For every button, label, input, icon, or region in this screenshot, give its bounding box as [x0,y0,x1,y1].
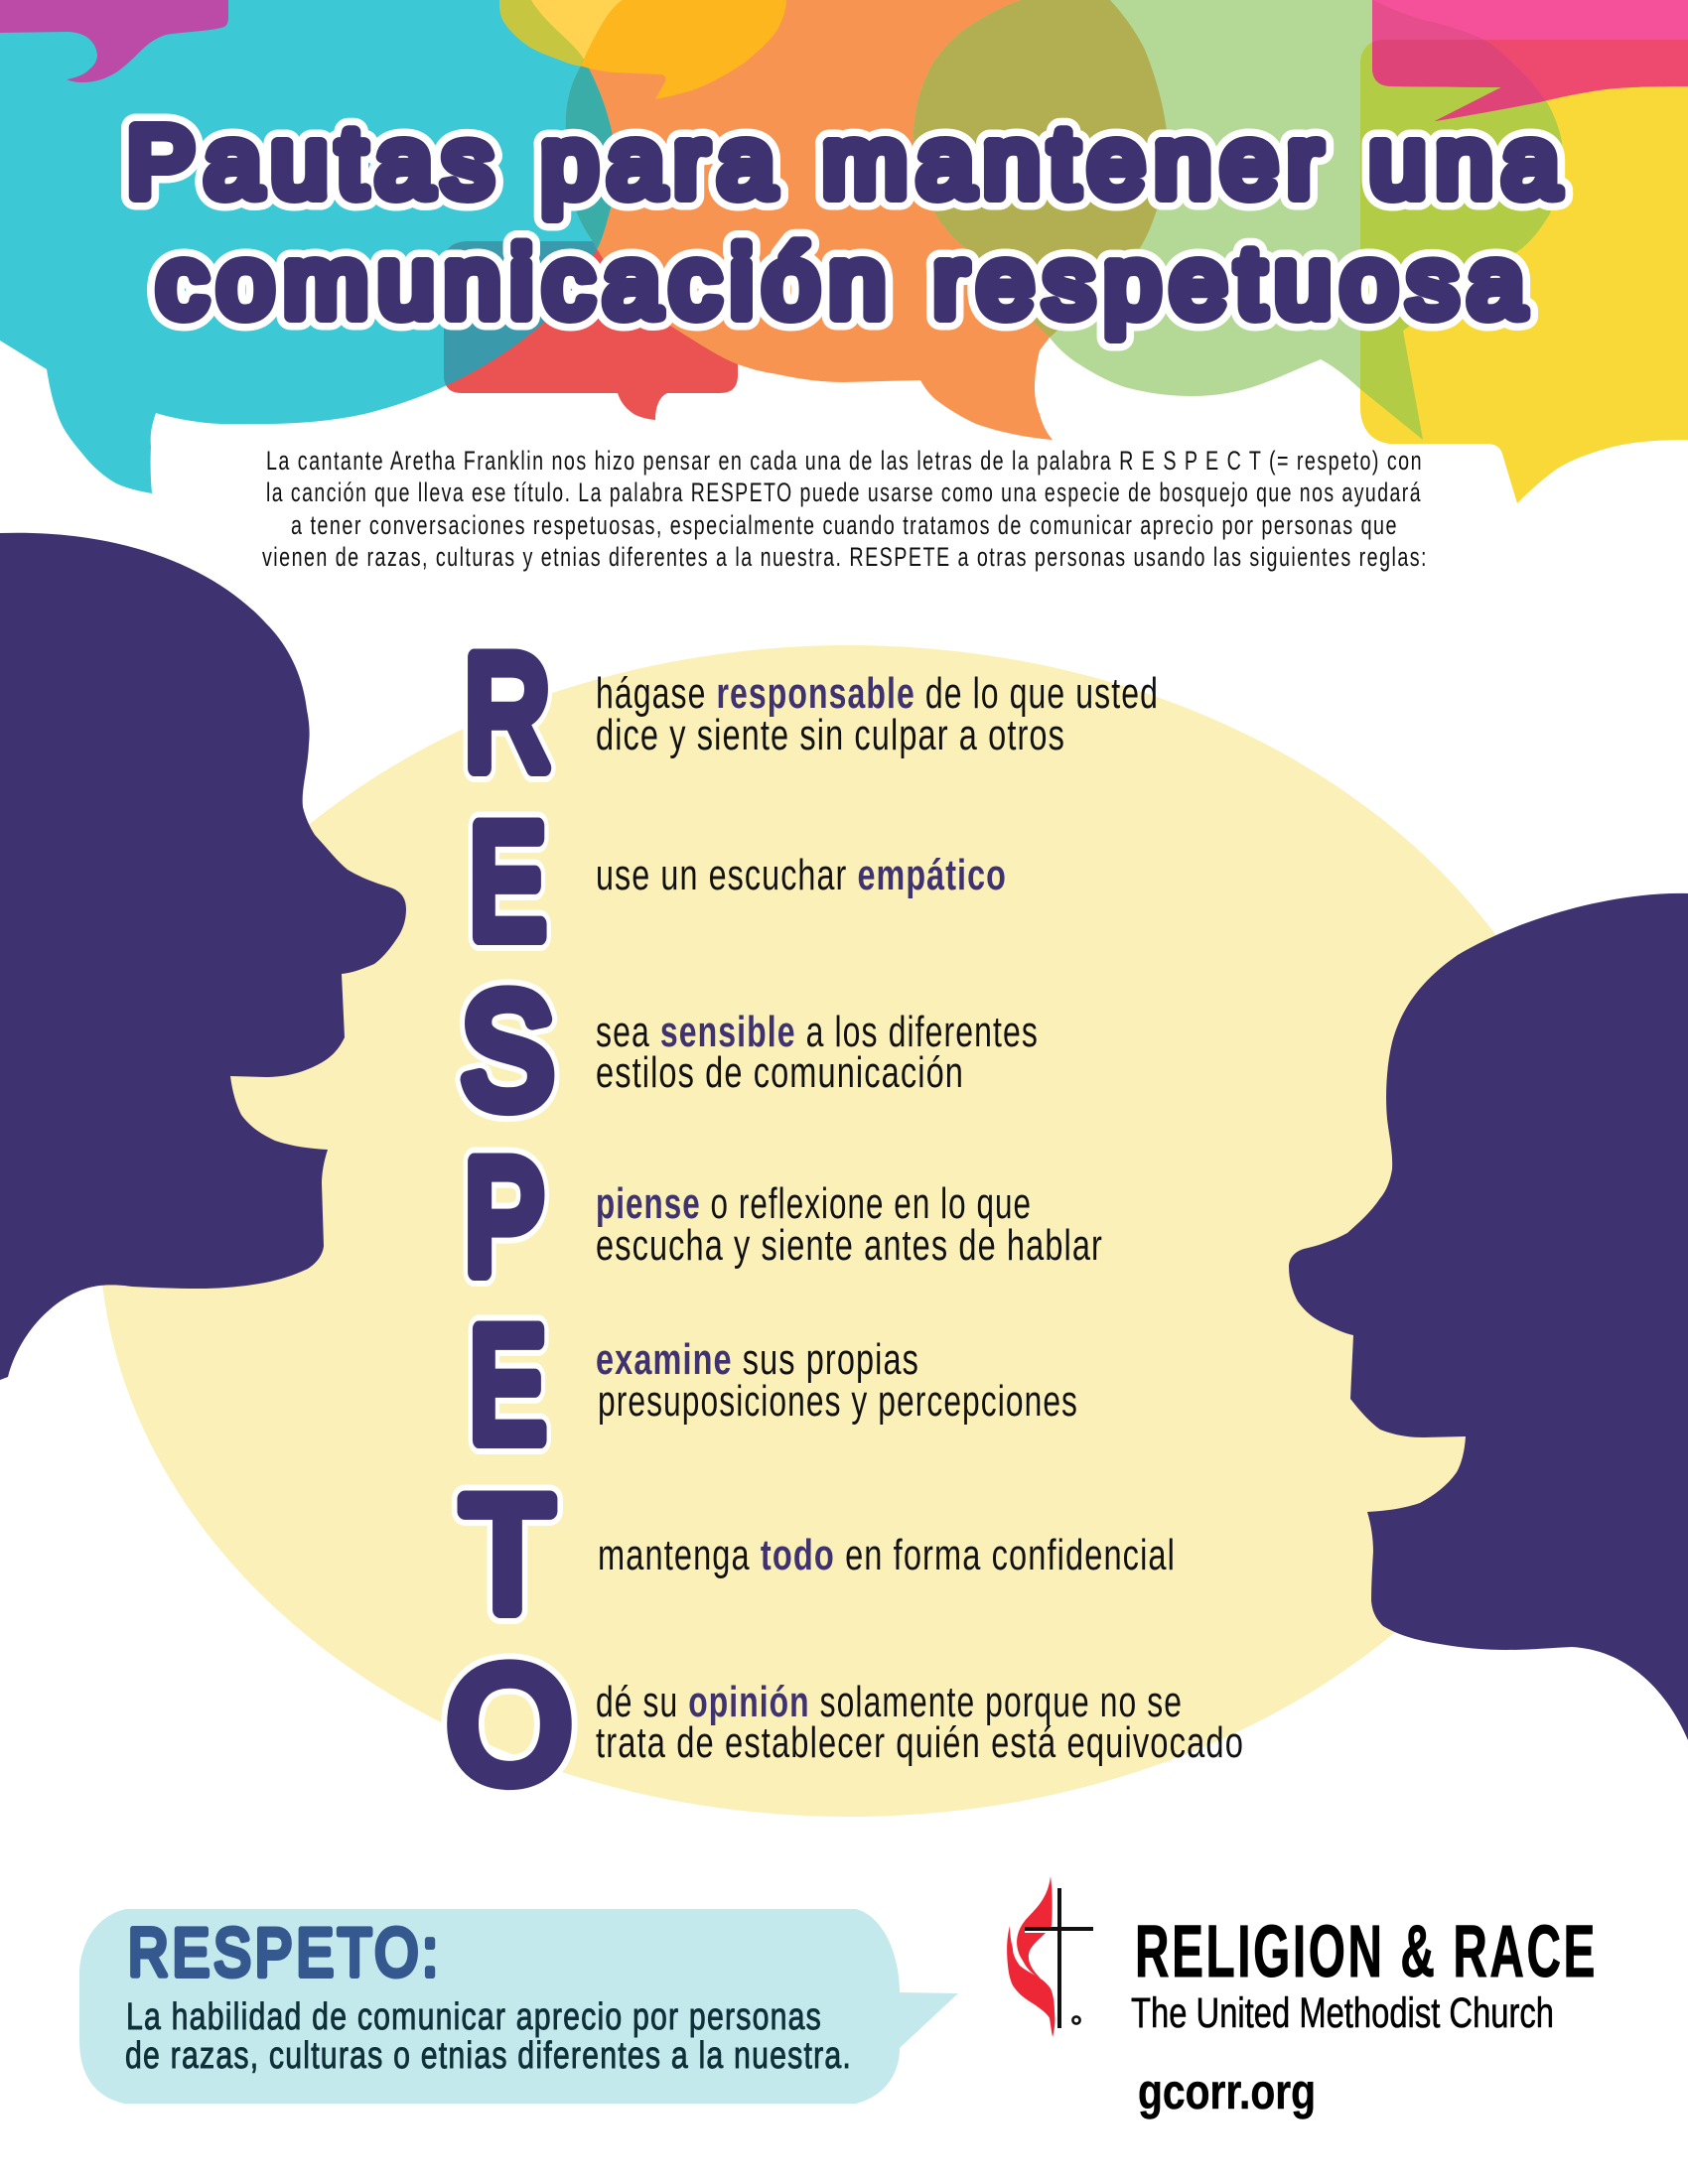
letter S: S [461,961,554,1141]
RESPETO vertical acronym [448,623,571,1815]
callout bubble [79,1909,958,2104]
pink and yellow overlap [1372,40,1688,121]
letter E: E [469,792,546,971]
letter O: O [448,1635,571,1815]
rule E: use un escuchar empático [596,851,1007,899]
letter E: E [469,1295,546,1475]
cyan speech bubble [0,0,616,493]
callout text: La habilidad de comunicar aprecio por personas [126,1996,822,2038]
website: gcorr.org [1138,2064,1316,2119]
callout text [125,1996,852,2077]
rules list [596,669,1244,1767]
pink, green and yellow overlap [1372,40,1545,121]
background speech bubbles [0,0,1688,503]
rule P [596,1179,1103,1270]
callout heading: RESPETO: [128,1915,442,1990]
letter P: P [465,1128,544,1306]
letter E: E [469,792,546,971]
letter R: R [465,623,550,802]
title [127,107,1569,338]
title: comunicación respetuosa [157,226,1534,338]
rule P: escucha y siente antes de hablar [596,1221,1103,1270]
purple speech bubble [0,0,228,82]
title: Pautas para mantener una [127,107,1569,218]
letter O: O [448,1635,571,1815]
rule E second: presuposiciones y percepciones [598,1377,1078,1426]
rule O: dé su opinión solamente porque no se [596,1678,1183,1726]
green speech bubble [914,0,1562,440]
letter R: R [465,623,550,802]
left head silhouette [0,533,406,1380]
yellow and cyan overlap [499,0,584,67]
rule O: trata de establecer quién está equivocado [596,1718,1244,1767]
orange and cyan overlap [566,60,613,249]
pink and green overlap [1372,0,1545,121]
rule S [596,1008,1039,1097]
rule E second: examine sus propias [596,1335,919,1384]
pink speech bubble [1372,0,1688,121]
green and orange overlap [914,0,1167,338]
pale yellow ellipse [99,645,1599,1817]
rule E second [596,1335,1078,1426]
letter T: T [462,1465,553,1644]
rule P: piense o reflexione en lo que [596,1179,1032,1228]
rule S: sea sensible a los diferentes [596,1008,1039,1056]
rule R: hágase responsable de lo que usted [596,669,1159,718]
orange and yellow overlap [580,0,786,99]
intro paragraph [262,446,1428,572]
rule S: estilos de comunicación [596,1048,964,1097]
letter E: E [469,1295,546,1475]
red speech bubble [444,241,738,420]
definition callout [79,1909,958,2104]
letter S: S [461,961,554,1141]
red and cyan overlap [444,241,598,385]
callout text: de razas, culturas o etnias diferentes a la nuestra. [125,2035,852,2077]
orange speech bubble [566,0,1167,440]
yellow top speech bubble [499,0,786,99]
letter T: T [462,1465,553,1644]
organisation name [1131,1910,1598,2037]
yellow right speech bubble [1360,40,1688,503]
rule O [596,1678,1244,1767]
letter P: P [465,1128,544,1306]
organisation name: The United Methodist Church [1131,1989,1554,2037]
icon: cross and flame logo [1007,1876,1093,2037]
right head silhouette [1289,893,1688,1740]
rule R: dice y siente sin culpar a otros [596,711,1065,759]
title: Pautas para mantener una [127,107,1569,218]
rule T: mantenga todo en forma confidencial [598,1531,1176,1579]
rule R [596,669,1159,759]
title: comunicación respetuosa [157,226,1534,338]
yellow and green overlap [1360,42,1563,440]
